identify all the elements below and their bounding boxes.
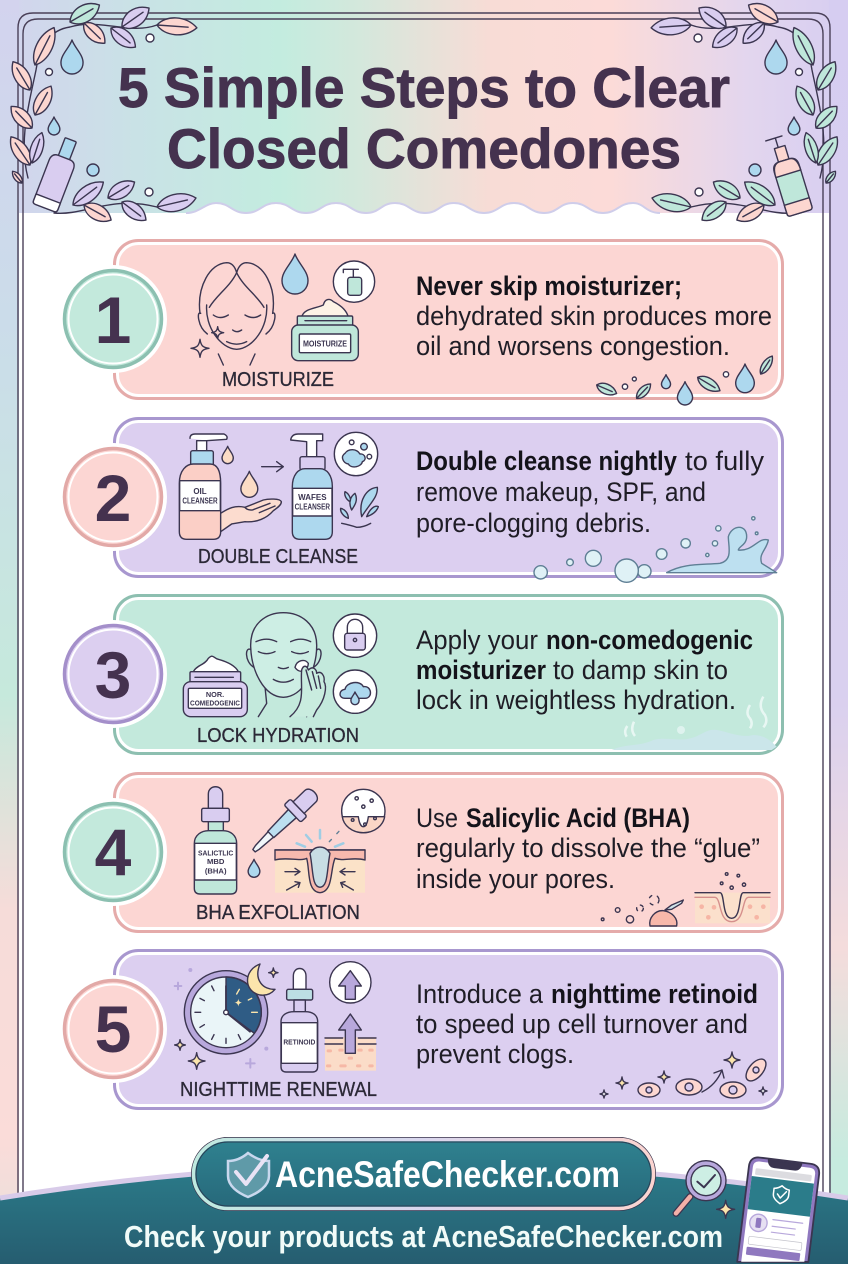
text block: step 2: Double cleanse nightly <box>416 446 677 476</box>
text block: step 4: Salicylic Acid (BHA) <box>466 803 690 833</box>
icon: oil cleanser to water cleanser: WAFES <box>298 493 327 502</box>
icon: oil cleanser to water cleanser: OIL <box>193 487 207 496</box>
icon: BHA serum, dropper and pore: (BHA) <box>205 866 227 875</box>
icon: phone with checker page <box>737 1156 820 1264</box>
icon: magnifying glass <box>676 1161 735 1218</box>
step number 5 <box>59 975 167 1083</box>
panel: step 1 moisturize <box>59 239 784 405</box>
icon: oil cleanser to water cleanser: CLEANSER <box>182 496 218 505</box>
icon: oil cleanser to water cleanser <box>179 432 378 539</box>
footer banner <box>0 1164 848 1264</box>
step label: MOISTURIZE <box>222 369 334 391</box>
icon: shield check <box>228 1153 269 1197</box>
title: 5 Simple Steps to Clear <box>118 56 730 119</box>
panel: step 2 double cleanse <box>59 417 784 582</box>
icon: right pump bottle <box>765 134 813 217</box>
text block: step 2 <box>416 446 765 538</box>
decoration: exfoliation and pore <box>601 873 770 926</box>
decoration: renewing cells <box>600 1052 770 1098</box>
step number 2: 2 <box>95 461 131 535</box>
decoration: water and steam <box>612 697 777 750</box>
text block: step 5 <box>416 979 758 1069</box>
call to action: Check your products at AcneSafeChecker.com <box>124 1219 723 1254</box>
step number 4 <box>59 798 167 906</box>
website name: AcneSafeChecker.com <box>275 1154 620 1195</box>
text block: step 5: nighttime retinoid <box>551 979 758 1009</box>
icon: clock, moon, retinoid bottle and skin arrow: RETINOID <box>283 1038 315 1047</box>
step label: NIGHTTIME RENEWAL <box>180 1079 377 1101</box>
icon: non-comedogenic jar, face, lock and cloud: NOR. <box>206 690 224 699</box>
icon: non-comedogenic jar, face, lock and cloud: COMEDOGENIC <box>190 699 241 708</box>
text block: step 3: non-comedogenic <box>546 625 753 655</box>
text block: step 2: remove makeup, SPF, and <box>416 477 706 507</box>
text block: step 3: to damp skin to <box>553 655 728 685</box>
step number 1: 1 <box>95 283 131 357</box>
text block: step 2: pore-clogging debris. <box>416 508 651 538</box>
text block: step 5: prevent clogs. <box>416 1039 574 1069</box>
step label: LOCK HYDRATION <box>197 725 359 747</box>
step number 4: 4 <box>95 815 132 889</box>
text block: step 1 <box>416 271 772 361</box>
icon: face, drop, pump and moisturizer jar <box>191 254 375 365</box>
step number 3: 3 <box>95 638 131 712</box>
website pill button <box>191 1137 656 1211</box>
text block: step 4: Use <box>416 803 458 833</box>
panel: step 3 lock hydration <box>59 594 784 755</box>
text block: step 3 <box>416 625 753 715</box>
text block: step 2: to fully <box>685 446 765 476</box>
icon: clock, moon, retinoid bottle and skin arrow <box>175 962 376 1072</box>
icon: oil cleanser to water cleanser: CLEANSER <box>295 502 330 511</box>
text block: step 3: moisturizer <box>416 655 546 685</box>
floral decoration: left <box>5 0 198 227</box>
floral decoration: right <box>650 0 843 227</box>
icon: left bottle <box>33 135 83 213</box>
text block: step 4 <box>416 803 760 894</box>
text block: step 4: inside your pores. <box>416 864 615 894</box>
step number 3 <box>59 620 167 728</box>
decoration: bubbles and splash <box>534 517 777 582</box>
text block: step 3: Apply your <box>416 625 538 655</box>
decoration: leaves and droplets <box>595 354 776 405</box>
icon: BHA serum, dropper and pore: MBD <box>207 857 225 866</box>
icon: BHA serum, dropper and pore: SALICTLIC <box>198 848 234 857</box>
step label: DOUBLE CLEANSE <box>198 546 358 568</box>
step number 1 <box>59 265 167 373</box>
header background band <box>19 0 829 213</box>
step number 2 <box>59 443 167 551</box>
panel: step 5 nighttime renewal <box>59 949 784 1110</box>
text block: step 1: oil and worsens congestion. <box>416 331 730 361</box>
step number 5: 5 <box>95 992 131 1066</box>
icon: BHA serum, dropper and pore <box>194 784 385 894</box>
text block: step 1: dehydrated skin produces more <box>416 301 772 331</box>
panel: step 4 bha exfoliation <box>59 772 784 933</box>
title: Closed Comedones <box>167 117 681 180</box>
icon: non-comedogenic jar, face, lock and cloud <box>183 613 377 717</box>
text block: step 4: regularly to dissolve the “glue” <box>416 833 760 863</box>
text block: step 3: lock in weightless hydration. <box>416 685 736 715</box>
text block: step 5: to speed up cell turnover and <box>416 1009 748 1039</box>
title <box>118 56 730 180</box>
text block: step 1: Never skip moisturizer; <box>416 271 682 301</box>
icon: face, drop, pump and moisturizer jar: MOISTURIZE <box>303 338 347 348</box>
step label: BHA EXFOLIATION <box>196 902 360 924</box>
text block: step 5: Introduce a <box>416 979 543 1009</box>
